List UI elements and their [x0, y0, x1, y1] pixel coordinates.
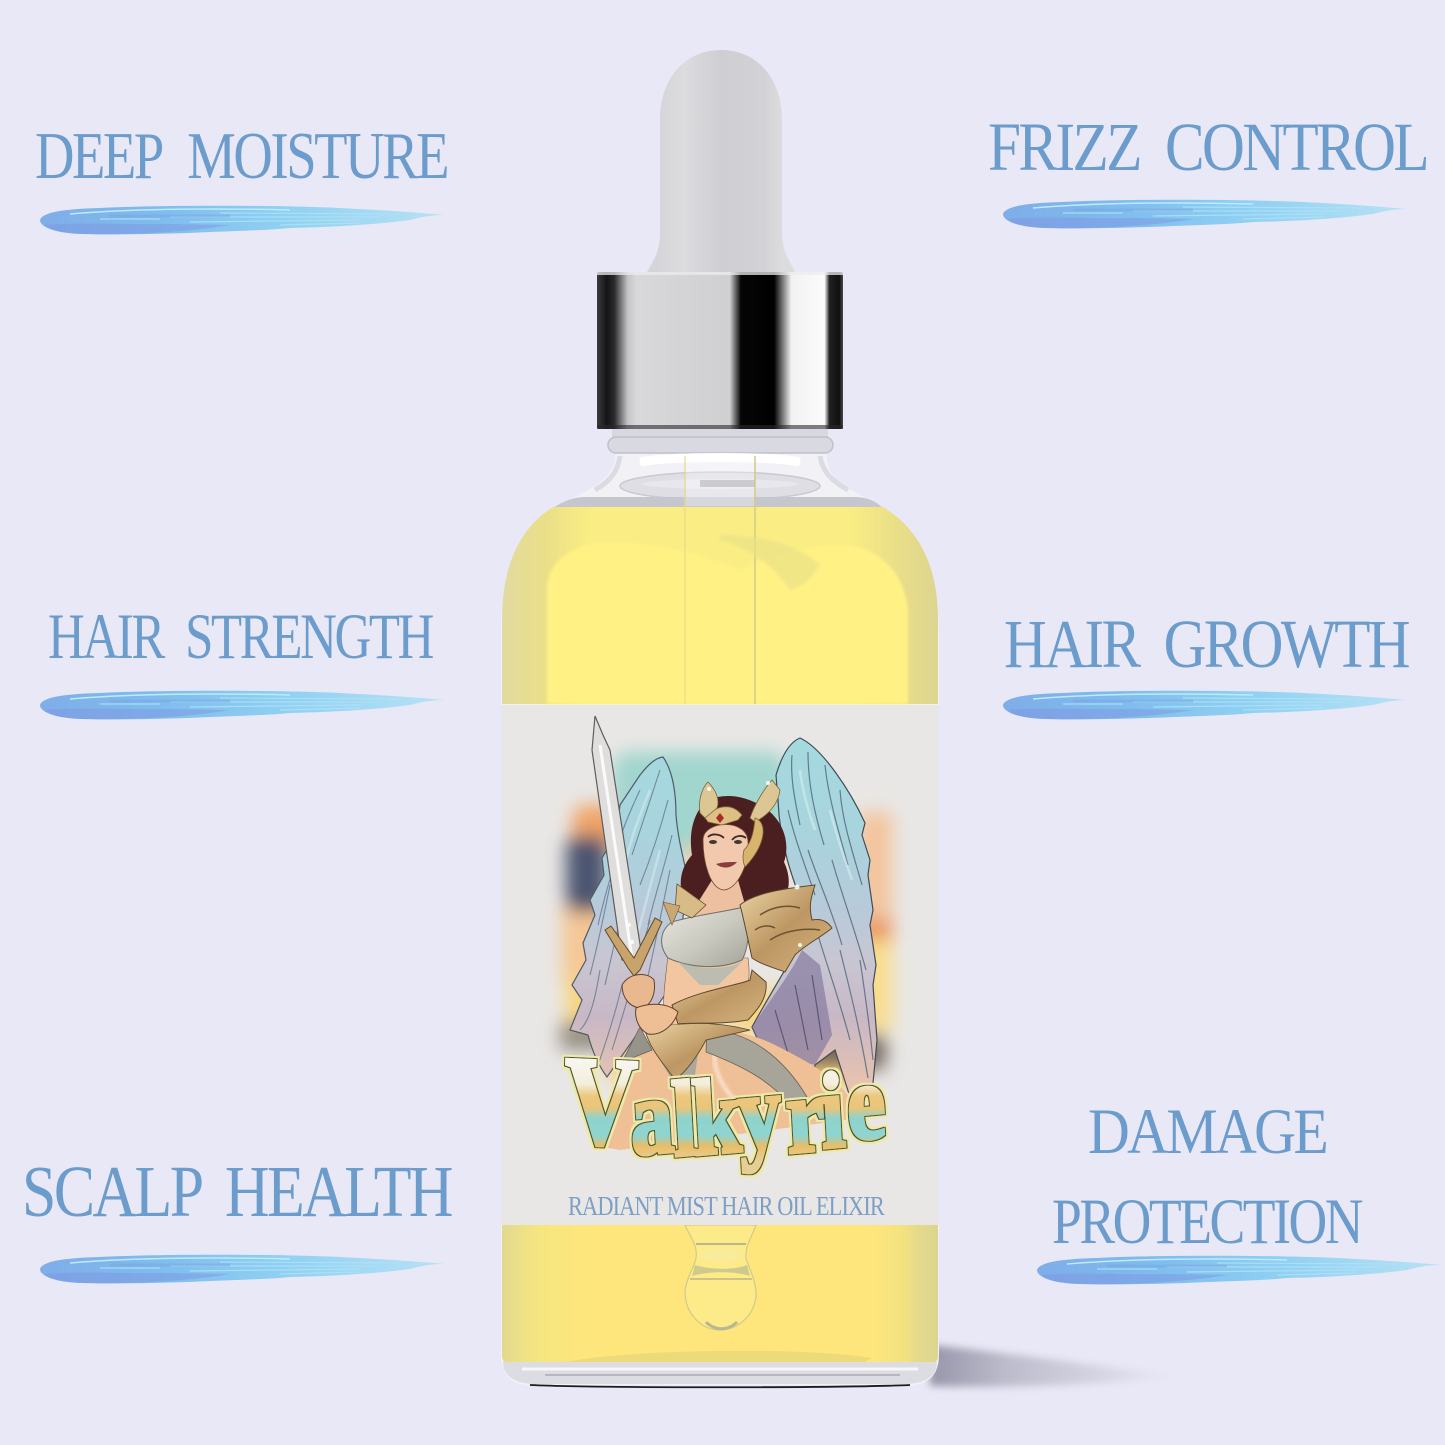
label artwork: valkyrie	[560, 716, 892, 1180]
heading: damage protection: PROTECTION	[1052, 1186, 1363, 1258]
sky background	[560, 752, 892, 1090]
gold skirt	[645, 1023, 750, 1080]
yellow oil: upper	[502, 507, 938, 704]
facial features	[708, 834, 746, 868]
glass bottle body	[501, 452, 939, 1385]
heading: scalp health: SCALP HEALTH	[22, 1151, 452, 1232]
neck reflections	[553, 456, 883, 508]
brush stroke: scalp health	[40, 1255, 445, 1283]
heading: hair strength: HAIR STRENGTH	[48, 601, 434, 673]
sword blade	[592, 716, 642, 960]
gray cloth	[622, 1027, 807, 1110]
bottle shadow	[930, 1345, 1175, 1387]
logo: valkyrie: alkyrie	[627, 1042, 888, 1180]
silver waist	[678, 962, 742, 985]
product bottle	[501, 50, 939, 1387]
label subtitle: RADIANT MIST HAIR OIL ELIXIR	[568, 1191, 885, 1221]
silver collar	[597, 272, 843, 429]
brush stroke: deep moisture	[40, 206, 445, 234]
midriff	[664, 955, 749, 1025]
oil inner highlight	[547, 542, 908, 704]
brush stroke: hair strength	[40, 691, 445, 719]
brush stroke: hair growth	[1003, 691, 1408, 719]
dropper tube	[685, 456, 820, 704]
heading: damage protection: DAMAGE	[1088, 1096, 1326, 1168]
gold forearm	[672, 970, 766, 1024]
glass base	[503, 1362, 937, 1387]
hands on hilt	[622, 975, 678, 1034]
face	[703, 824, 748, 890]
dropper bulb	[647, 50, 795, 272]
right wing	[752, 738, 877, 1097]
left wing	[570, 757, 688, 1077]
oil bottom pool	[566, 1351, 872, 1365]
neck and chest	[690, 880, 748, 915]
silver top	[662, 906, 749, 967]
sword crossguard	[605, 918, 662, 976]
heading: deep moisture: DEEP MOISTURE	[35, 119, 447, 193]
hips and legs	[592, 1027, 860, 1150]
blade centre line	[600, 745, 632, 958]
glass neck ring	[608, 429, 833, 453]
helmet and diadem	[699, 780, 780, 867]
product label	[501, 705, 939, 1225]
brush stroke: frizz control	[1003, 200, 1408, 228]
logo: valkyrie: V	[562, 1029, 639, 1173]
dropper tip in oil	[685, 1225, 756, 1330]
hair	[681, 796, 789, 910]
yellow oil: lower	[502, 1224, 938, 1365]
shoulder armor	[663, 884, 832, 972]
sparkles	[627, 781, 802, 947]
brush stroke: damage protection	[1037, 1256, 1442, 1284]
skin highlight	[714, 1050, 735, 1100]
heading: damage protection	[1052, 1096, 1363, 1258]
